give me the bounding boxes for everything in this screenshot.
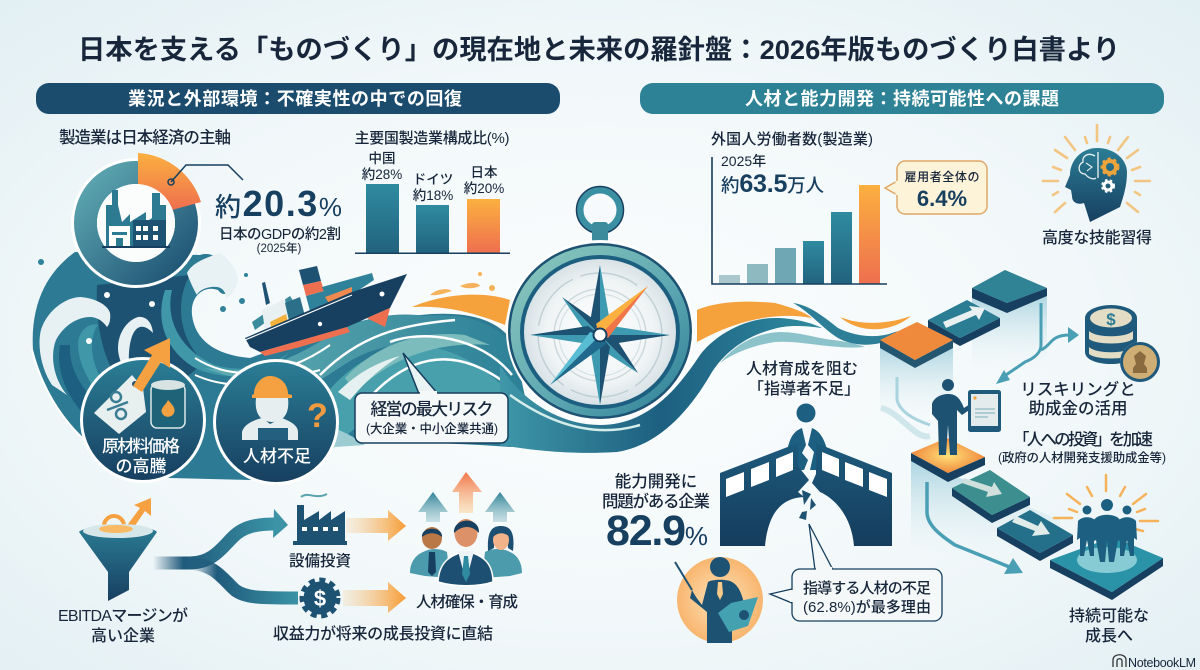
chart: GDP donut: [71, 153, 243, 288]
heading: manufacturing is the core: 製造業は日本経済の主軸: [59, 128, 231, 147]
illustration: upward steps: [880, 270, 1047, 420]
header: right section: [640, 83, 1164, 114]
chart: foreign workers bars: [711, 131, 887, 284]
callout: shortage of instructors: (62.8%)が最多理由: [803, 598, 931, 616]
chart: foreign workers bars: 外国人労働者数(製造業): [711, 131, 873, 148]
chart: manufacturing share by country: 中国: [368, 151, 396, 166]
icon: factory investment: [293, 494, 347, 545]
callout: shortage of instructors: [770, 524, 942, 621]
icon: broken bridge with person: [720, 404, 892, 546]
stat: 82.9%: 能力開発に: [615, 472, 697, 491]
stat: 20.3% of GDP: (2025年): [257, 241, 302, 255]
icon: instructor: [675, 557, 763, 643]
ribbon wave: from under the compass to the steps: [500, 302, 911, 453]
stat: 82.9%: 問題がある企業: [602, 491, 710, 511]
label: reskilling and subsidies: 助成金の活用: [1028, 399, 1128, 418]
label: instructor shortage heading: 「指導者不足」: [748, 380, 860, 398]
label: instructor shortage heading: 人材育成を阻む: [746, 360, 858, 378]
icon: gear with dollar: [302, 580, 338, 616]
callout: 6.4% of employees: 雇用者全体の: [904, 169, 980, 184]
header: left section: 業況と外部環境：不確実性の中での回復: [128, 89, 462, 109]
callout: biggest management risk: 経営の最大リスク: [370, 400, 494, 419]
wave body: [33, 252, 530, 480]
chart: foreign workers bars: 約63.5万人: [721, 170, 824, 198]
header: left section: [36, 83, 560, 114]
chart: manufacturing share by country: [354, 129, 510, 254]
chart: manufacturing share by country: 約18%: [413, 188, 453, 203]
risk badge: raw material prices: 原材料価格: [102, 437, 180, 456]
text: profitability: 収益力が将来の成長投資に直結: [273, 624, 493, 643]
label: accelerate investment in people: 「人への投資」を加速: [1013, 430, 1153, 449]
stat: 82.9%: 82.9%: [606, 507, 708, 555]
label: advanced skills: 高度な技能習得: [1042, 229, 1152, 247]
risk badge: labor shortage: [213, 359, 339, 485]
callout: 6.4% of employees: [885, 161, 987, 214]
arrow: to people lower: [343, 582, 406, 613]
stat: 20.3% of GDP: 約20.3%: [215, 183, 342, 224]
label: EBITDA: [58, 606, 188, 645]
label: talent securing: 人材確保・育成: [416, 593, 518, 611]
compass pendant: [576, 186, 624, 244]
foam dots: [104, 292, 110, 298]
callout: biggest management risk: [355, 353, 508, 443]
watermark: NotebookLM: NotebookLM: [1128, 656, 1196, 670]
compass body: [506, 240, 694, 422]
label: reskilling and subsidies: リスキリングと: [1020, 380, 1136, 399]
label: reskilling and subsidies: [1020, 380, 1136, 418]
label: instructor shortage heading: [746, 360, 860, 398]
icon: people with up arrows: [410, 472, 522, 586]
risk badge: raw material prices: [80, 357, 206, 483]
stat: 20.3% of GDP: [215, 183, 342, 255]
icon: funnel: [79, 498, 157, 601]
icon: person with tablet: [932, 379, 1001, 455]
icon: gear with dollar: $: [314, 586, 326, 611]
chart: manufacturing share by country: 日本: [470, 165, 498, 180]
illustration: descending steps with person: [911, 379, 1073, 565]
risk badge: labor shortage: ?: [307, 397, 328, 435]
flow arrows: EBITDA splits to two investments: [153, 509, 298, 598]
label: capital investment: 設備投資: [289, 552, 351, 570]
arrowheads: reskilling loop: [996, 327, 1079, 384]
icon: factory: [102, 190, 170, 248]
icon: coin stack with seal: [1085, 305, 1160, 382]
stat: 20.3% of GDP: 日本のGDPの約2割: [219, 226, 341, 243]
icon: cargo ship: [245, 266, 407, 356]
inner swirl stripes: [161, 290, 290, 376]
risk badge: labor shortage: 人材不足: [243, 447, 311, 466]
icon: coin stack with seal: $: [1106, 310, 1116, 329]
icon: rising arrow: [133, 338, 170, 392]
label: sustainable growth: [1069, 607, 1149, 645]
callout: shortage of instructors: 指導する人材の不足: [803, 579, 931, 597]
compass star: [530, 265, 670, 405]
arrow: down to growth: [927, 482, 1023, 574]
right swell bands: [205, 314, 530, 420]
chart: manufacturing share by country: 約28%: [362, 167, 402, 182]
foam crest: main: [187, 253, 238, 298]
label: EBITDA: EBITDAマージンが: [58, 606, 188, 625]
label: accelerate investment in people: (政府の人材開発支援助成金等): [998, 450, 1166, 465]
chart: manufacturing share by country: ドイツ: [413, 172, 453, 187]
chart: manufacturing share by country: 約20%: [464, 181, 504, 196]
arrows: reskilling loop: [881, 303, 1070, 436]
label: accelerate investment in people: [998, 430, 1166, 465]
illustration: sustainable growth platform: [1050, 475, 1163, 600]
label: sustainable growth: 成長へ: [1085, 627, 1133, 645]
callout: 6.4% of employees: 6.4%: [917, 186, 967, 211]
wave illustration: left storm waves: [32, 252, 530, 480]
callout: biggest management risk: (大企業・中小企業共通): [366, 421, 498, 436]
icon: head with brain and gears: [1043, 125, 1150, 222]
dark interior: [97, 275, 205, 395]
white outlines between swirls: [195, 345, 330, 373]
header: right section: 人材と能力開発：持続可能性への課題: [745, 88, 1059, 109]
title: 日本を支える「ものづくり」の現在地と未来の羅針盤：2026年版ものづくり白書より: [78, 35, 1120, 65]
risk badge: raw material prices: の高騰: [116, 457, 166, 476]
orange spray: [412, 295, 510, 325]
label: sustainable growth: 持続可能な: [1069, 607, 1149, 625]
chart: foreign workers bars: 2025年: [721, 153, 766, 169]
compass: [506, 186, 694, 422]
foam crest: left: [40, 297, 110, 395]
stat: 82.9%: [602, 472, 710, 555]
chart: manufacturing share by country: 主要国製造業構成比(%): [354, 129, 510, 147]
donut leader line: [171, 165, 243, 182]
label: EBITDA: 高い企業: [91, 627, 155, 645]
arrow: to people upper: [346, 510, 406, 541]
foam crest: middle: [118, 317, 153, 365]
